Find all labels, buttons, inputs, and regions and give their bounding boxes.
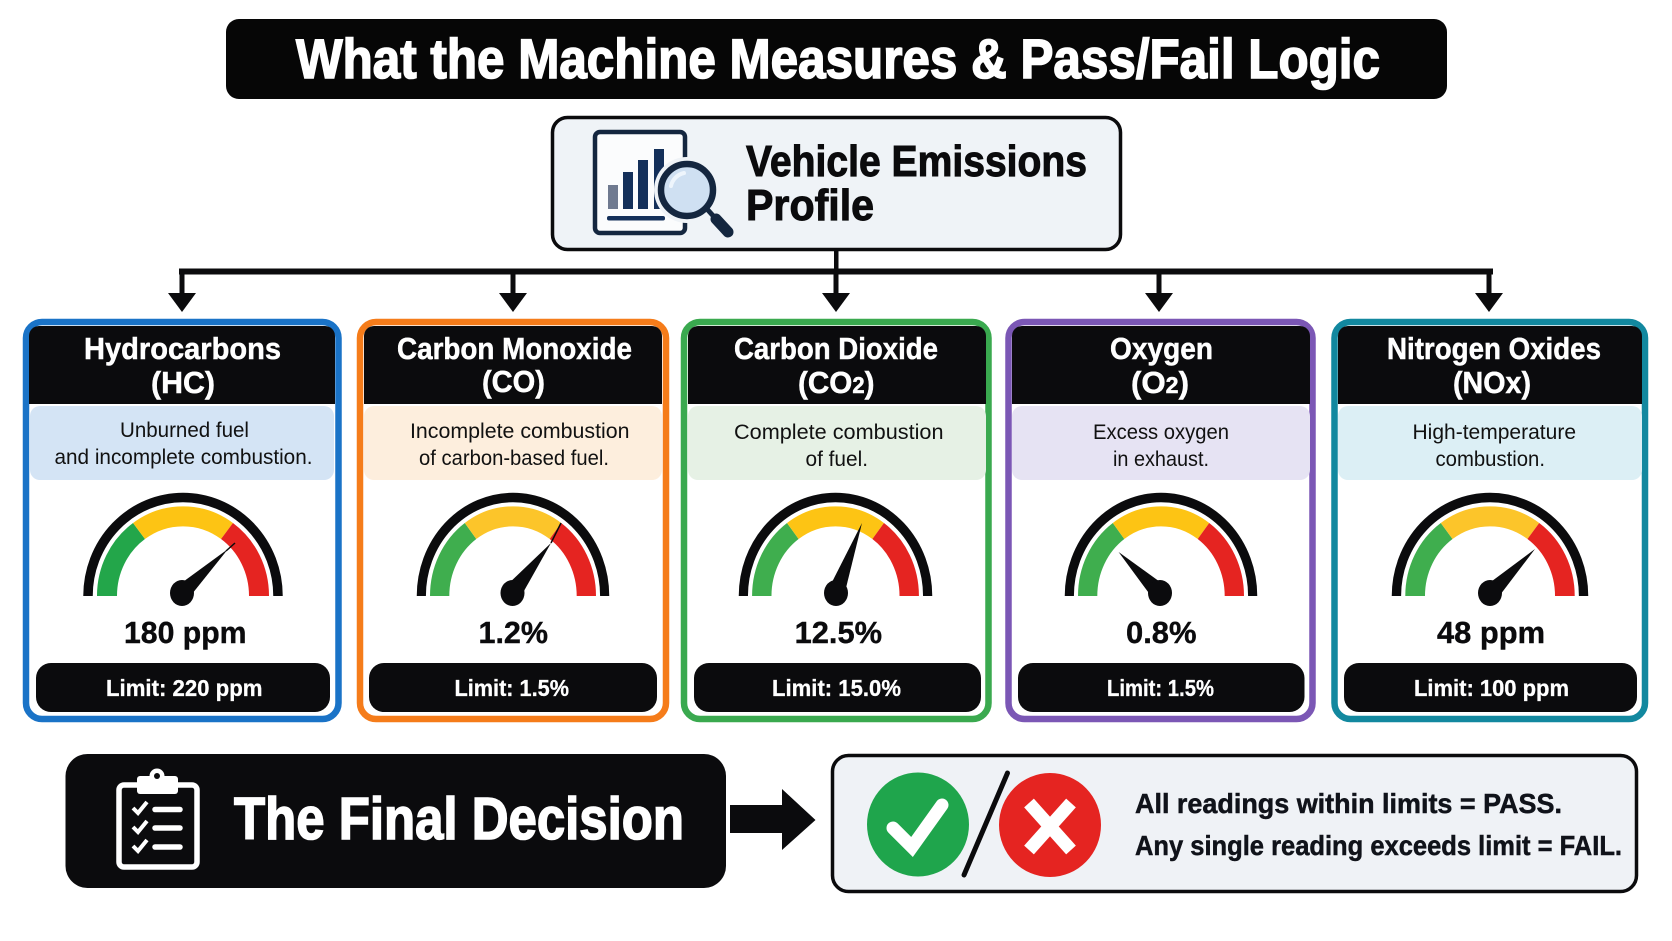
panel: carbon monoxide	[360, 322, 666, 719]
icon: green check	[867, 772, 969, 876]
reading: 48 ppm: 48 ppm	[1437, 615, 1545, 650]
gauge: carbon dioxide	[743, 498, 928, 606]
description: carbon dioxide: of fuel.	[806, 448, 868, 471]
panel: pass/fail result	[832, 756, 1636, 892]
description: carbon dioxide: Complete combustion	[734, 421, 944, 444]
description: carbon monoxide	[364, 406, 662, 480]
header: nitrogen oxides: (NOx)	[1453, 365, 1531, 400]
header: carbon dioxide: (CO2)	[798, 365, 874, 400]
limit: 220 ppm	[36, 663, 330, 712]
description: carbon monoxide: Incomplete combustion	[410, 420, 630, 443]
description: carbon monoxide: of carbon-based fuel.	[419, 447, 609, 470]
header: hydrocarbons: Hydrocarbons	[84, 331, 281, 366]
reading: 180 ppm: 180 ppm	[124, 615, 246, 650]
description: hydrocarbons: and incomplete combustion.	[54, 446, 312, 469]
gauge: hydrocarbons	[88, 498, 278, 606]
description: hydrocarbons	[30, 406, 334, 480]
description: oxygen: Excess oxygen	[1093, 421, 1229, 444]
header: carbon monoxide: (CO)	[482, 364, 545, 399]
limit: 1.5%	[369, 663, 657, 712]
limit: 15.0%: Limit: 15.0%	[772, 675, 901, 701]
description: hydrocarbons: Unburned fuel	[120, 419, 249, 442]
icon: clipboard checklist	[119, 768, 197, 867]
description: carbon dioxide	[688, 406, 986, 480]
reading: 0.8%: 0.8%	[1126, 615, 1196, 650]
panel: hydrocarbons	[26, 322, 338, 719]
panel: vehicle emissions profile	[552, 118, 1120, 250]
heading: the final decision: The Final Decision	[234, 786, 684, 852]
gauge: oxygen	[1069, 498, 1253, 606]
arrows: connector tree	[168, 250, 1503, 312]
description: nitrogen oxides	[1338, 406, 1642, 480]
header: oxygen: (O2)	[1131, 365, 1189, 400]
limit: 220 ppm: Limit: 220 ppm	[106, 675, 262, 701]
header: hydrocarbons: (HC)	[151, 365, 215, 400]
description: oxygen: in exhaust.	[1113, 448, 1209, 471]
reading: 12.5%: 12.5%	[795, 615, 882, 650]
heading: vehicle emissions profile: Vehicle Emissions	[746, 137, 1087, 186]
panel: the final decision	[66, 754, 726, 888]
limit: 15.0%	[694, 663, 981, 712]
limit: 1.5%: Limit: 1.5%	[454, 675, 569, 701]
panel: carbon dioxide	[684, 322, 988, 719]
text: pass/fail rule: Any single reading exceeds limit = FAIL.	[1135, 830, 1622, 861]
arrow: to result	[730, 789, 816, 850]
description: oxygen	[1012, 406, 1310, 480]
heading: vehicle emissions profile: Profile	[746, 181, 874, 230]
panel: oxygen	[1008, 322, 1312, 719]
description: nitrogen oxides: High-temperature	[1412, 421, 1576, 444]
limit: 1.5%: Limit: 1.5%	[1107, 675, 1214, 701]
header: hydrocarbons	[29, 326, 335, 404]
header: nitrogen oxides	[1338, 326, 1642, 404]
text: pass/fail rule	[1135, 788, 1622, 861]
gauge: nitrogen oxides	[1396, 498, 1584, 606]
icon: red cross	[999, 773, 1101, 877]
text: pass/fail rule: All readings within limits = PASS.	[1135, 788, 1562, 819]
header: oxygen	[1012, 326, 1310, 404]
panel: nitrogen oxides	[1334, 322, 1645, 719]
header: carbon monoxide: Carbon Monoxide	[397, 331, 632, 366]
header: nitrogen oxides: Nitrogen Oxides	[1387, 331, 1601, 366]
gauge: carbon monoxide	[421, 498, 605, 606]
header: carbon dioxide	[688, 326, 986, 404]
header: oxygen: Oxygen	[1110, 331, 1213, 366]
title: What the Machine Measures & Pass/Fail Logic	[296, 27, 1380, 90]
limit: 1.5%	[1018, 663, 1304, 712]
description: nitrogen oxides: combustion.	[1436, 448, 1545, 471]
header: carbon monoxide	[364, 326, 662, 404]
limit: 100 ppm	[1344, 663, 1637, 712]
reading: 1.2%: 1.2%	[478, 615, 548, 650]
heading: vehicle emissions profile	[746, 137, 1087, 230]
slash divider	[964, 773, 1008, 875]
header: carbon dioxide: Carbon Dioxide	[734, 331, 938, 366]
limit: 100 ppm: Limit: 100 ppm	[1414, 675, 1569, 701]
icon: report with magnifier	[595, 132, 728, 233]
